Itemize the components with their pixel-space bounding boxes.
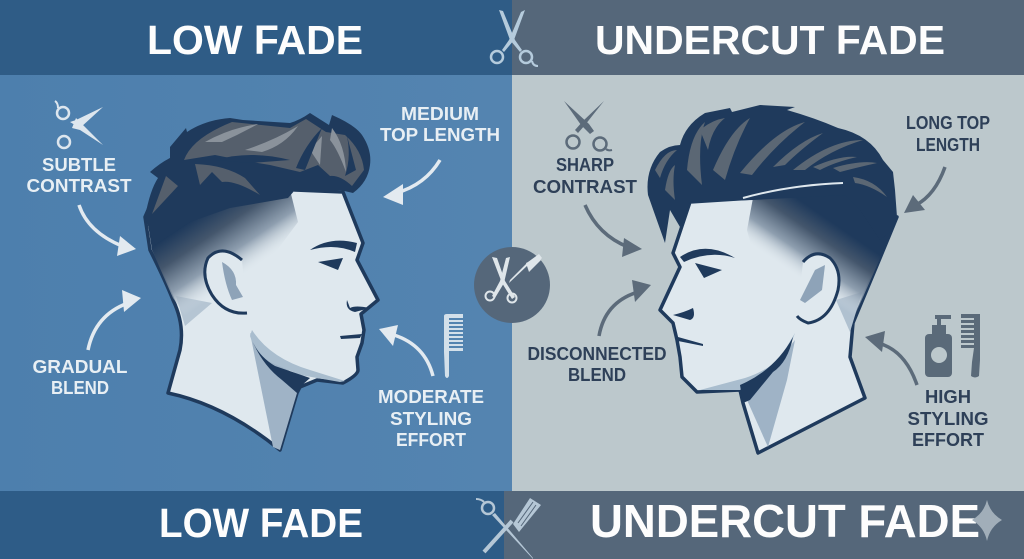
brow eye nose mouth [673, 249, 735, 346]
icon: comb moderate styling [444, 314, 463, 378]
label: sharp contrast: SHARP [556, 155, 614, 175]
arrow: subtle contrast [79, 205, 136, 256]
arrow: sharp contrast [585, 205, 642, 257]
arrow: medium top length [383, 160, 440, 205]
arrow: disconnected blend [599, 280, 651, 336]
label: gradual blend [32, 357, 128, 398]
icon: center scissors and comb badge [474, 247, 550, 323]
label: moderate styling effort: STYLING [390, 409, 472, 429]
brow eye nose mouth [310, 241, 370, 339]
panel: undercut fade background [512, 75, 1024, 491]
neck back shade [836, 292, 862, 332]
icon: pump bottle [925, 315, 952, 377]
hair outline [648, 105, 897, 243]
icon: header scissors [491, 10, 538, 66]
hair strands [655, 118, 887, 200]
hair dark streaks [215, 128, 356, 176]
header: low fade: LOW FADE [147, 17, 363, 63]
icon: comb high styling [961, 314, 980, 378]
label: medium top length [380, 104, 500, 145]
label: moderate styling effort [378, 387, 484, 450]
label: subtle contrast: SUBTLE [42, 155, 116, 175]
part line [743, 183, 843, 198]
fade [747, 170, 897, 340]
jaw dark band [251, 338, 310, 393]
footer: undercut fade [504, 491, 1024, 559]
arrow: long top length [904, 167, 945, 213]
label: moderate styling effort: EFFORT [396, 430, 466, 450]
label: high styling effort: HIGH [925, 387, 971, 407]
label: moderate styling effort: MODERATE [378, 387, 484, 407]
label: gradual blend: BLEND [51, 378, 109, 398]
label: long top length [906, 113, 990, 155]
ear [205, 251, 247, 313]
icon: footer scissors and comb [476, 498, 541, 559]
jaw shadow [700, 333, 795, 390]
arrow: moderate styling effort [379, 325, 433, 376]
label: long top length: LONG TOP [906, 113, 990, 133]
arrow: high styling effort [865, 331, 917, 385]
hair outline [145, 113, 370, 245]
icon: scissors subtle contrast [55, 101, 103, 148]
skin [145, 160, 378, 450]
footer: low fade [0, 491, 504, 559]
neck shadow [250, 333, 297, 450]
label: high styling effort: STYLING [908, 409, 988, 429]
ear [797, 254, 839, 323]
footer: low fade: LOW FADE [159, 500, 363, 546]
fade [147, 170, 298, 330]
panel: low fade background [0, 75, 512, 491]
neck back shade [176, 296, 212, 326]
header: undercut fade [512, 0, 1024, 75]
icon: scissors sharp contrast [564, 101, 612, 150]
illustration: low fade head [145, 113, 378, 450]
illustration: undercut fade head [648, 105, 897, 453]
hair strands [152, 119, 364, 214]
label: disconnected blend: BLEND [568, 365, 626, 385]
label: medium top length: TOP LENGTH [380, 125, 500, 145]
label: medium top length: MEDIUM [401, 104, 479, 124]
label: disconnected blend [528, 344, 666, 385]
label: high styling effort: EFFORT [912, 430, 984, 450]
label: disconnected blend: DISCONNECTED [528, 344, 666, 364]
label: gradual blend: GRADUAL [32, 357, 128, 377]
header: low fade [0, 0, 512, 75]
header: undercut fade: UNDERCUT FADE [595, 17, 945, 63]
skin [660, 198, 897, 453]
arrow: gradual blend [88, 290, 141, 350]
label: long top length: LENGTH [916, 135, 980, 155]
jaw shadow [250, 330, 345, 382]
label: high styling effort [908, 387, 988, 450]
label: sharp contrast [533, 155, 637, 197]
footer: undercut fade: UNDERCUT FADE [590, 495, 980, 547]
hair highlights [205, 124, 346, 172]
label: subtle contrast: CONTRAST [26, 176, 132, 196]
label: subtle contrast [26, 155, 132, 196]
label: sharp contrast: CONTRAST [533, 177, 637, 197]
neck shadow [747, 340, 795, 447]
jaw dark band [740, 337, 793, 403]
